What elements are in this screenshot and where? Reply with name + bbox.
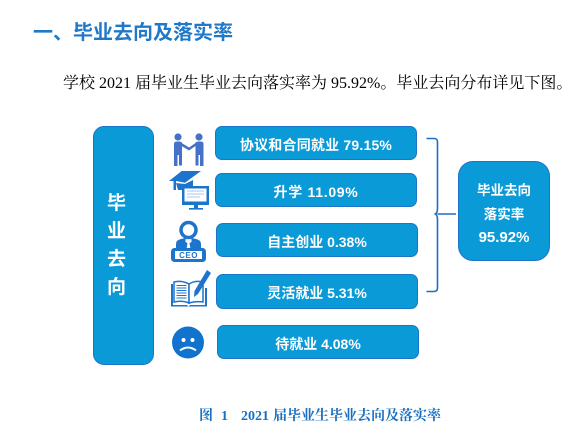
icon: graduation cap and monitor	[169, 171, 209, 210]
icon: handshake	[174, 133, 204, 166]
figure caption: 2021	[241, 409, 269, 424]
figure caption: 1	[221, 409, 228, 424]
rate label: 毕业去向	[477, 183, 531, 198]
panel: graduation destination	[93, 126, 154, 365]
rate label	[477, 183, 531, 222]
bar: further study: 升学 11.09%	[274, 184, 358, 200]
bar: further study	[215, 173, 417, 207]
figure caption: 图	[199, 409, 213, 424]
panel: graduation destination: 向	[107, 277, 126, 298]
bar: flexible employment: 灵活就业 5.31%	[267, 285, 367, 301]
panel: graduation destination: 毕	[107, 193, 126, 214]
figure caption	[199, 408, 441, 424]
bar: awaiting employment: 待就业 4.08%	[275, 336, 361, 352]
icon: book and pen	[171, 270, 211, 306]
bar: contract employment: 协议和合同就业 79.15%	[240, 137, 392, 153]
intro text: 学校 2021 届毕业生毕业去向落实率为 95.92%。毕业去向分布详见下图。	[63, 75, 572, 92]
figure caption: 届毕业生毕业去向及落实率	[273, 409, 441, 424]
title: 一、毕业去向及落实率	[33, 22, 233, 44]
bracket	[426, 138, 456, 292]
panel: graduation destination: 业	[107, 221, 126, 242]
bar: contract employment	[215, 126, 417, 160]
icon: CEO	[171, 220, 206, 262]
icon: CEO: CEO	[179, 251, 198, 260]
panel: graduation destination: 去	[107, 249, 126, 270]
bar: flexible employment	[216, 274, 418, 309]
rate value: 95.92%	[479, 229, 529, 246]
panel: overall destination rate	[458, 161, 550, 261]
bar: self-employment: 自主创业 0.38%	[267, 234, 367, 250]
rate label: 落实率	[484, 207, 524, 222]
bar: awaiting employment	[217, 325, 419, 359]
bar: self-employment	[216, 223, 418, 257]
icon: sad face	[172, 326, 204, 358]
